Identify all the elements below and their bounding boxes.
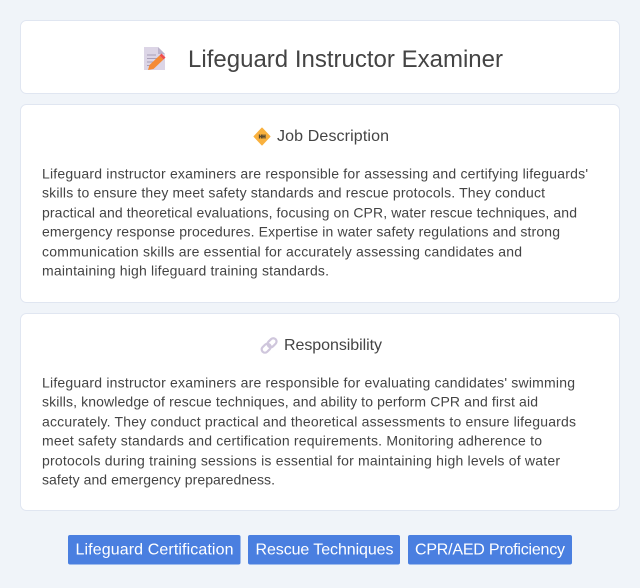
tag: rescue techniques <box>248 535 400 564</box>
icon: diamond sign <box>254 128 270 145</box>
panel: responsibility <box>20 314 620 510</box>
tag: lifeguard certification: Lifeguard Certification <box>76 542 234 558</box>
text block: job description: emergency response procedures. Expertise in water safety regulations and strong <box>42 224 560 240</box>
heading: job description: Job Description <box>277 128 389 145</box>
title: Lifeguard Instructor Examiner <box>188 46 503 73</box>
text block: responsibility: protocols during training sessions is essential for maintaining high levels of water <box>42 452 560 468</box>
panel: job description <box>20 104 620 302</box>
tag: lifeguard certification <box>68 535 240 564</box>
text block: job description: practical and theoretical evaluations, focusing on CPR, water rescue techniques, and <box>42 204 577 220</box>
text block: responsibility: skills, knowledge of rescue techniques, and ability to perform CPR and first aid <box>42 394 538 410</box>
panel: header <box>20 20 620 94</box>
text block: job description: communication skills are essential for accurately assessing candidates and <box>42 244 522 260</box>
text block: job description: maintaining high lifeguard training standards. <box>42 262 329 278</box>
text block: job description: skills to ensure they meet safety standards and rescue protocols. They conduct <box>42 184 545 200</box>
text block: responsibility <box>42 374 576 488</box>
tag: cpr/aed proficiency: CPR/AED Proficiency <box>415 542 565 558</box>
icon: document with pencil <box>144 47 166 70</box>
icon: link <box>260 337 278 354</box>
text block: job description <box>42 166 588 278</box>
tag: cpr/aed proficiency <box>408 535 572 564</box>
text block: responsibility: Lifeguard instructor examiners are responsible for evaluating candidates' swimming <box>42 374 575 390</box>
text block: responsibility: meet safety standards and certification requirements. Monitoring adherence to <box>42 432 542 448</box>
tag: rescue techniques: Rescue Techniques <box>256 542 394 558</box>
text block: job description: Lifeguard instructor examiners are responsible for assessing and certifying lifeguards' <box>42 166 588 182</box>
text block: responsibility: accurately. They conduct practical and theoretical assessments to ensure lifeguards <box>42 414 576 430</box>
text block: responsibility: safety and emergency preparedness. <box>42 472 275 488</box>
heading: responsibility: Responsibility <box>284 337 382 354</box>
